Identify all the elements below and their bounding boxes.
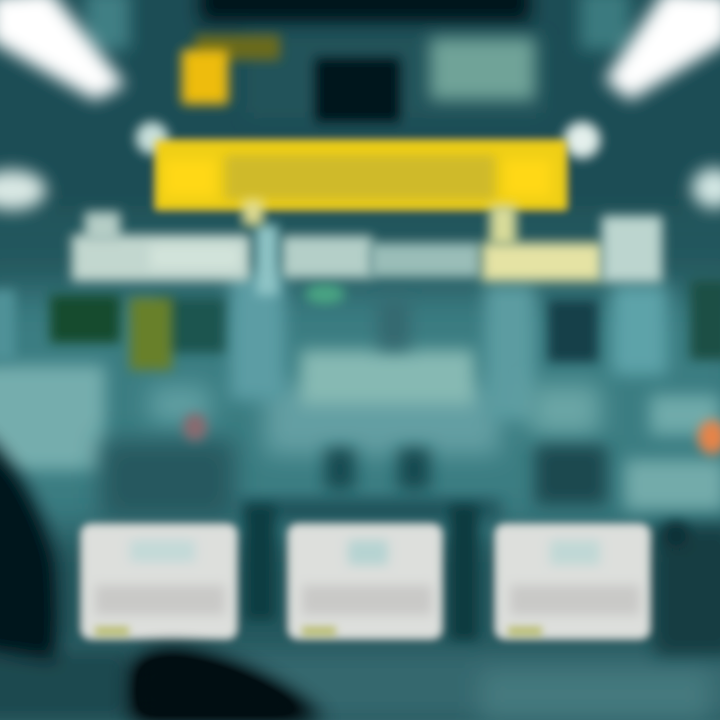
heading light-blue stem left (256, 225, 278, 295)
banner light right (564, 122, 600, 158)
card 2 text (302, 585, 432, 615)
card 1 text (95, 585, 225, 615)
side light right (692, 168, 720, 208)
card 3 accent (508, 626, 542, 636)
ceiling light right (605, 0, 720, 100)
ceiling light left (0, 0, 125, 100)
top screen dark section (315, 58, 400, 122)
card 3 heading (550, 540, 600, 565)
dark foreground wheel left (0, 430, 58, 660)
yellow logo mark (182, 50, 228, 104)
top screen light section (430, 38, 535, 100)
top screen panel (182, 35, 545, 122)
heading yellow word (482, 243, 602, 281)
card 1 (81, 524, 237, 639)
card 2 heading (348, 540, 388, 565)
side light left (0, 170, 46, 210)
card 3 (495, 524, 650, 639)
card 3 text (510, 585, 640, 615)
card 1 heading (130, 540, 195, 562)
card 1 accent (95, 626, 129, 636)
banner light left (136, 122, 168, 154)
red accent left (183, 413, 207, 441)
card 2 accent (302, 626, 336, 636)
dark foreground dashboard (132, 652, 325, 720)
logo olive arm (195, 35, 280, 60)
banner text band (225, 155, 495, 200)
yellow title banner (155, 140, 567, 210)
banner right highlight (505, 160, 550, 196)
heading yellow stem right (490, 205, 516, 245)
large heading band (72, 200, 662, 295)
orange accent right (698, 420, 720, 454)
card 2 (288, 524, 442, 639)
green accent (305, 284, 345, 304)
banner left highlight (165, 160, 215, 196)
top dark strip (200, 0, 530, 22)
